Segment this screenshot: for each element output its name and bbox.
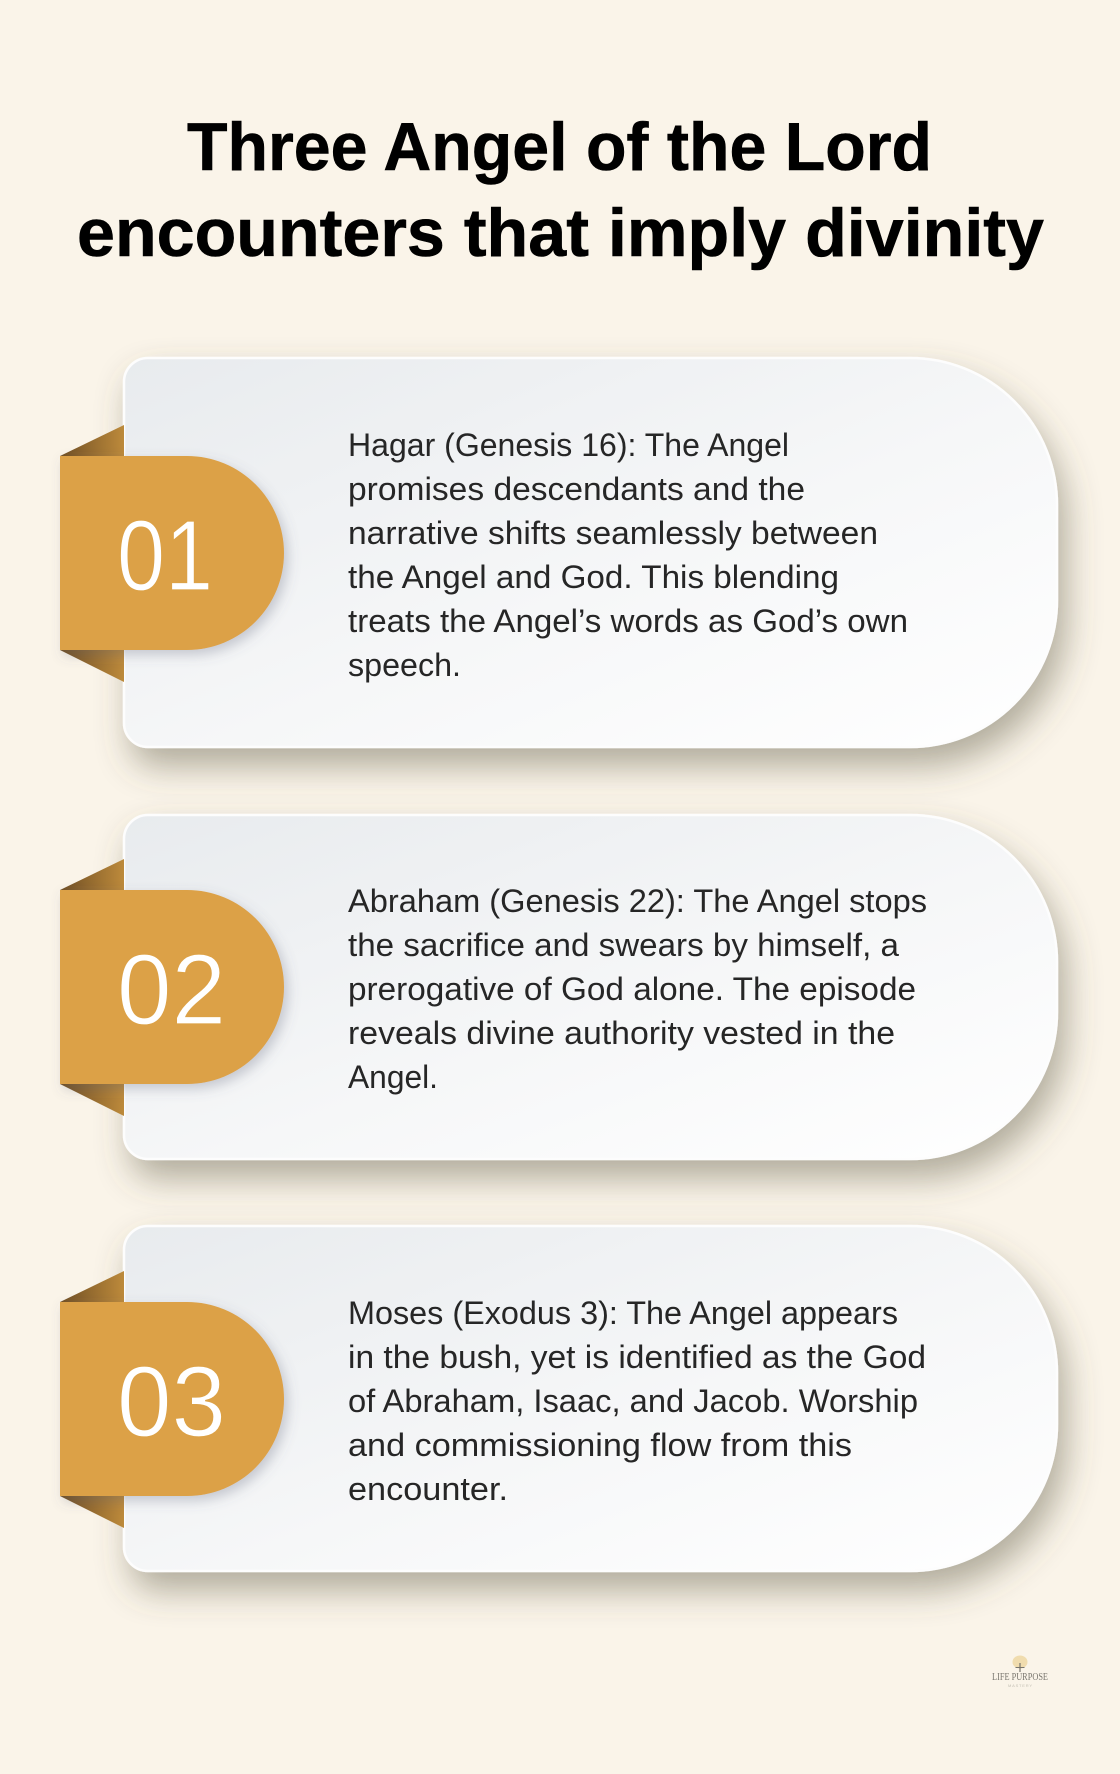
number badge 2: 02	[117, 934, 226, 1046]
text: Moses	[348, 1295, 926, 1507]
text: Moses: in the bush, yet is identified as the God	[348, 1339, 926, 1375]
text: Abraham	[348, 883, 927, 1095]
text: Hagar: Hagar (Genesis 16): The Angel	[348, 427, 789, 463]
title: encounters that imply divinity	[77, 195, 1044, 271]
number badge 1	[60, 456, 284, 650]
text: Abraham: Abraham (Genesis 22): The Angel stops	[348, 883, 927, 919]
text: Hagar: treats the Angel’s words as God’s own	[348, 603, 908, 639]
number badge 3	[60, 1302, 284, 1496]
panel: step 2 Abraham	[60, 815, 1057, 1159]
text: Hagar: the Angel and God. This blending	[348, 559, 839, 595]
text: Hagar: promises descendants and the	[348, 471, 805, 507]
text: Abraham: Angel.	[348, 1059, 438, 1095]
number badge 2	[60, 890, 284, 1084]
logo: LIFE PURPOSE	[992, 1672, 1048, 1683]
title	[77, 109, 1044, 271]
ribbon fold 3	[60, 1271, 124, 1528]
number badge 1: 01	[117, 500, 213, 612]
text: Abraham: reveals divine authority vested in the	[348, 1015, 895, 1051]
card 3	[124, 1226, 1057, 1571]
text: Moses: encounter.	[348, 1471, 508, 1507]
text: Moses: and commissioning flow from this	[348, 1427, 852, 1463]
text: Hagar	[348, 427, 908, 683]
icon: tree	[1012, 1656, 1028, 1672]
text: Hagar: speech.	[348, 647, 461, 683]
number badge 3: 03	[117, 1346, 226, 1458]
text: Abraham: the sacrifice and swears by himself, a	[348, 927, 899, 963]
panel: step 3 Moses	[60, 1226, 1057, 1571]
text: Moses: of Abraham, Isaac, and Jacob. Worship	[348, 1383, 918, 1419]
panel: step 1 Hagar	[60, 358, 1057, 747]
ribbon fold 1	[60, 425, 124, 682]
ribbon fold 2	[60, 859, 124, 1116]
logo: MASTERY	[1008, 1683, 1032, 1688]
card 2	[124, 815, 1057, 1159]
text: Abraham: prerogative of God alone. The episode	[348, 971, 916, 1007]
text: Hagar: narrative shifts seamlessly between	[348, 515, 878, 551]
title: Three Angel of the Lord	[187, 109, 932, 185]
text: Moses: Moses (Exodus 3): The Angel appears	[348, 1295, 898, 1331]
card 1	[124, 358, 1057, 747]
logo	[992, 1656, 1048, 1688]
